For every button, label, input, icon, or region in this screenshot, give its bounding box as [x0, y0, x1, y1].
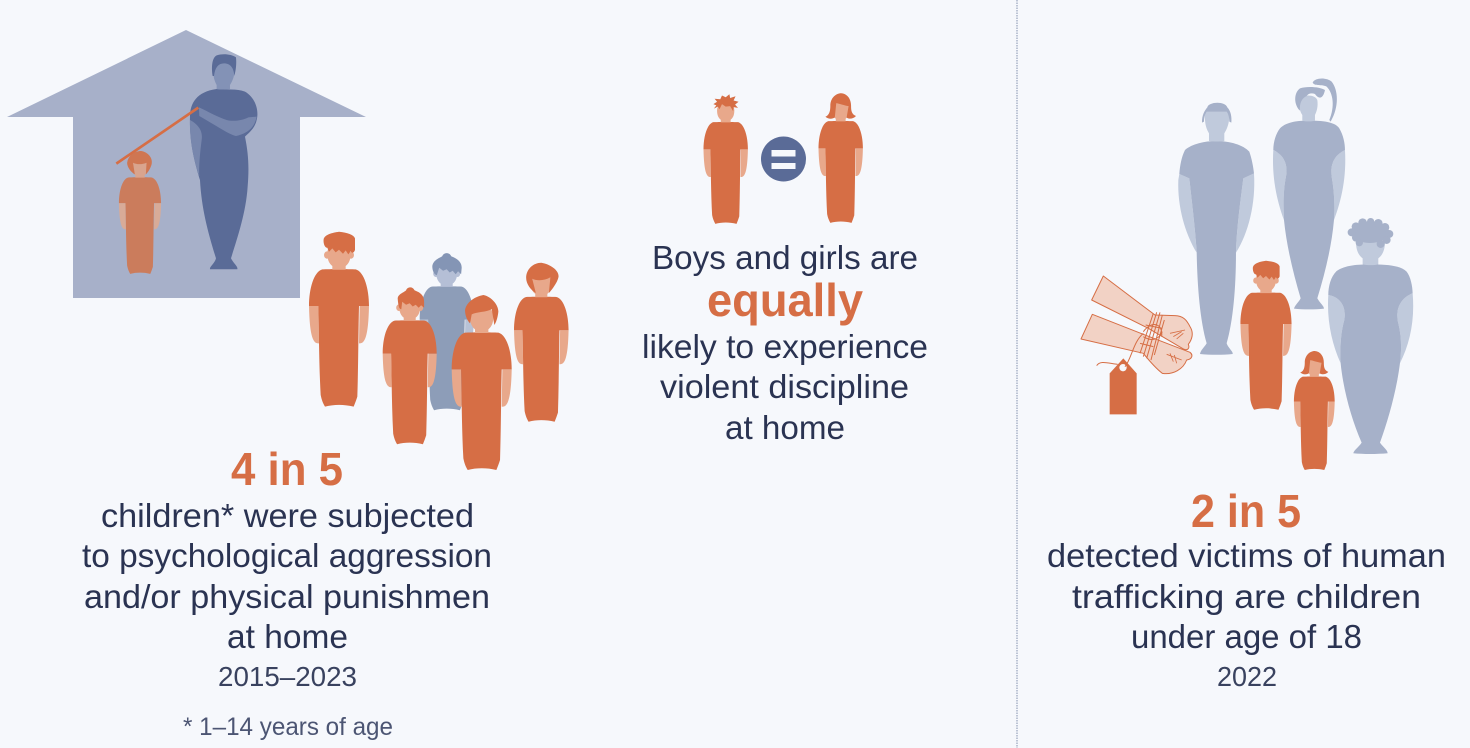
child boy [1240, 261, 1292, 410]
statistic: 4 in 5: 4 in 5 [231, 443, 343, 495]
icon: boy equals girl [703, 93, 863, 224]
child 4 [514, 263, 569, 422]
child girl [1294, 351, 1335, 470]
child 1 [309, 232, 369, 407]
child 3 [452, 295, 512, 470]
text block: detected victims: detected victims of human [1047, 537, 1446, 574]
icon: group of children [309, 232, 569, 470]
text block: subjected to aggression [82, 497, 492, 655]
adult woman with ponytail [1273, 79, 1345, 309]
panel: boys and girls equal [642, 93, 928, 446]
adult woman with curly hair [1328, 218, 1413, 454]
panel: violent discipline at home [7, 30, 569, 741]
text block: equally likely: at home [725, 409, 845, 446]
girl figure [818, 93, 863, 223]
text block: equally likely: Boys and girls are [652, 239, 918, 276]
text block: detected victims: trafficking are children [1072, 578, 1421, 615]
icon: adults and children [1178, 79, 1413, 470]
icon: house with adult and child [7, 30, 366, 298]
house [7, 30, 366, 298]
text block: subjected to aggression: and/or physical punishmen [84, 578, 490, 615]
boy figure [703, 94, 748, 224]
adult man [1178, 103, 1254, 355]
adult figure holding stick [116, 54, 257, 269]
text block: equally likely [642, 239, 928, 446]
footnote: * 1–14 years of age [183, 713, 393, 741]
icon: tied hands with price tag [1081, 276, 1192, 414]
statistic: 2 in 5: 2 in 5 [1191, 485, 1301, 537]
child figure [119, 151, 161, 274]
text block: equally likely: likely to experience [642, 328, 928, 365]
text block: detected victims: under age of 18 [1131, 618, 1362, 655]
text block: equally likely: violent discipline [660, 368, 909, 405]
text block: subjected to aggression: to psychological aggression [82, 537, 492, 574]
divider line [1016, 0, 1018, 748]
text block: detected victims [1047, 537, 1446, 655]
panel: human trafficking [1047, 79, 1446, 692]
year: 2022 [1217, 661, 1277, 692]
text block: subjected to aggression: at home [227, 618, 348, 655]
year range: 2015–2023 [218, 661, 357, 692]
text block: subjected to aggression: children* were subjected [101, 497, 474, 534]
equals sign [761, 136, 806, 182]
child, background blue [420, 253, 474, 410]
child 2 [383, 287, 437, 444]
text block: equally likely: equally [707, 274, 863, 326]
